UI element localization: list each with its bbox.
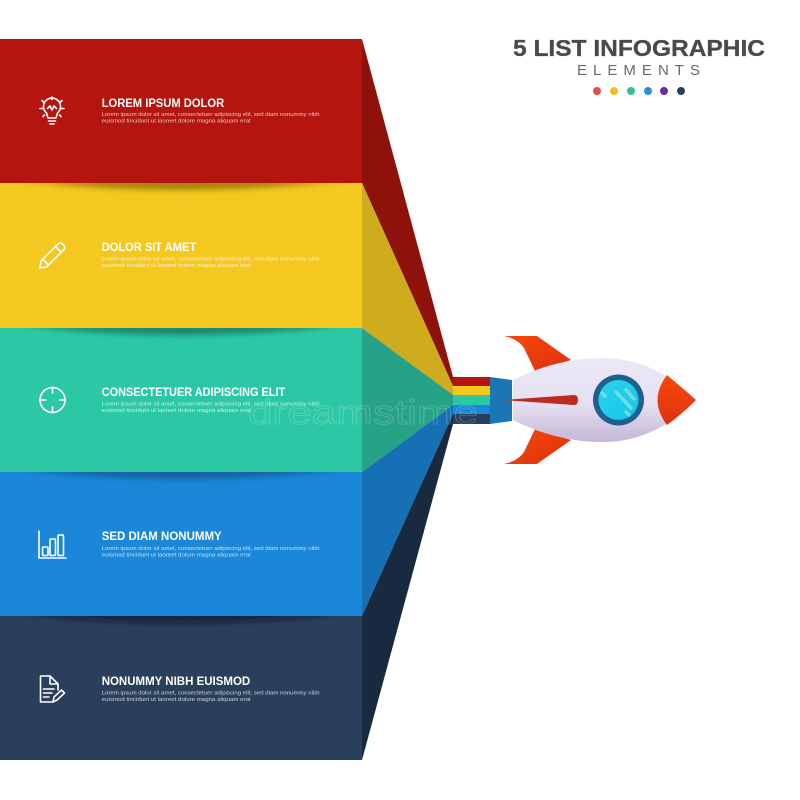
rocket [490,336,696,464]
icon: rocket top fin [504,336,571,371]
icon: rocket window [593,374,644,426]
icon: pencil [40,243,65,268]
icon: rocket bottom fin [504,429,571,464]
text: band 5: euismod tincidunt ut laoreet dolore magna aliquam erat [102,697,251,703]
icon: bar chart [39,531,66,558]
text: band 3: CONSECTETUER ADIPISCING ELIT [102,387,285,399]
text: band 4: SED DIAM NONUMMY [102,531,222,543]
text: band 2: DOLOR SIT AMET [102,242,196,254]
side facets converging on the rocket [362,39,453,760]
text: band 4 [102,531,320,558]
text: band 4: Lorem ipsum dolor sit amet, consectetuer adipiscing elit, sed diam nonummy nibh [102,546,320,552]
icon: rocket body [513,358,696,442]
text: band 3: euismod tincidunt ut laoreet dolore magna aliquam erat [102,408,251,414]
icon: rocket nozzle [490,377,512,424]
panel: yellow band [0,183,362,328]
title: 5 LIST INFOGRAPHIC [513,35,765,61]
band shadows [20,180,345,623]
text: band 4: euismod tincidunt ut laoreet dolore magna aliquam erat [102,552,251,558]
text: band 1: LOREM IPSUM DOLOR [102,98,225,110]
icon: light bulb [40,97,64,124]
panel: red band [0,39,362,183]
text: band 2: euismod tincidunt ut laoreet dolore magna aliquam erat [102,263,251,269]
text: band 3: Lorem ipsum dolor sit amet, consectetuer adipiscing elit, sed diam nonummy nibh [102,402,320,408]
text: band 1 [102,98,320,124]
panel: teal band [0,328,362,472]
text: band 5: NONUMMY NIBH EUISMOD [102,676,250,688]
panel: blue band [0,472,362,616]
subtitle: ELEMENTS [577,62,700,79]
text: band 1: Lorem ipsum dolor sit amet, consectetuer adipiscing elit, sed diam nonummy nibh [102,112,320,118]
watermark: dreamstime [248,394,478,432]
panel: navy band [0,616,362,760]
icon: crosshair target [40,388,65,412]
icon: rocket nose cone [658,375,696,425]
icon: rocket stripe [503,395,578,405]
text: band 2: Lorem ipsum dolor sit amet, consectetuer adipiscing elit, sed diam nonummy nibh [102,256,320,262]
legend dots [593,87,685,95]
text: band 5 [102,676,320,703]
text: band 5: Lorem ipsum dolor sit amet, consectetuer adipiscing elit, sed diam nonummy nibh [102,690,320,696]
text: band 3 [102,387,320,414]
text: band 1: euismod tincidunt ut laoreet dolore magna aliquam erat [102,118,251,124]
rainbow exhaust stripes [453,377,490,424]
text: band 2 [102,242,320,269]
icon: document with pen [40,676,64,702]
